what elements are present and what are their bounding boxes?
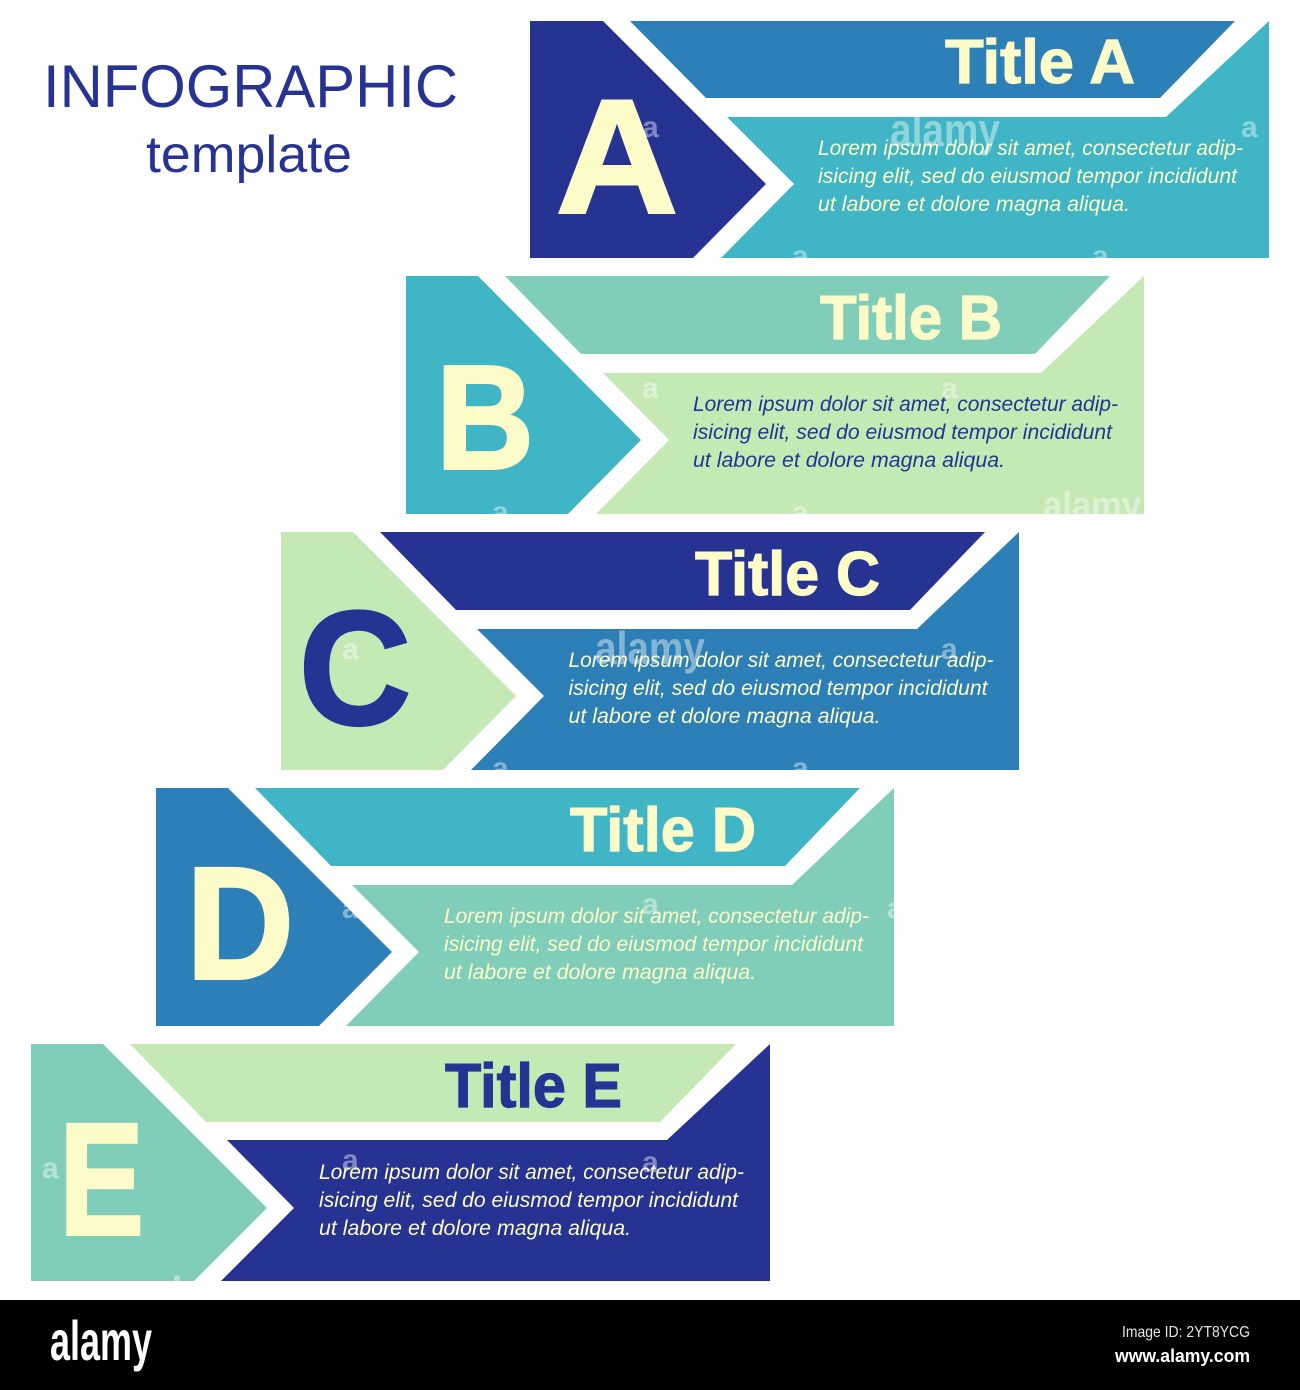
subheading: template: template bbox=[146, 126, 352, 184]
body panel: A bbox=[721, 21, 1269, 258]
text block: E: isicing elit, sed do eiusmod tempor incididunt bbox=[319, 1188, 739, 1212]
heading: INFOGRAPHIC: INFOGRAPHIC bbox=[43, 53, 458, 120]
panel: row E bbox=[31, 1044, 770, 1281]
text block: D bbox=[444, 904, 869, 984]
watermarks: a bbox=[642, 111, 659, 144]
arrow: E bbox=[31, 1044, 267, 1281]
text block: B bbox=[693, 392, 1118, 472]
letter D: D bbox=[186, 834, 294, 1012]
panel: row C bbox=[281, 532, 1019, 770]
watermarks: a bbox=[941, 633, 958, 666]
watermarks: a bbox=[342, 633, 359, 666]
title bar: C bbox=[380, 532, 985, 610]
watermarks: alamy bbox=[1043, 485, 1141, 527]
heading: Title C: Title C bbox=[695, 540, 880, 609]
watermarks: a bbox=[642, 888, 659, 921]
watermarks: a bbox=[342, 1144, 359, 1177]
text block: D: Lorem ipsum dolor sit amet, consectetur adip- bbox=[444, 904, 869, 928]
letter B: B bbox=[436, 336, 534, 500]
title bar: D bbox=[255, 788, 860, 866]
arrow: D bbox=[156, 788, 392, 1026]
text block: B: ut labore et dolore magna aliqua. bbox=[693, 448, 1005, 472]
title bar: E bbox=[130, 1044, 736, 1122]
footer logo: alamy bbox=[50, 1309, 152, 1372]
heading: Title B: Title B bbox=[820, 284, 1002, 353]
watermarks: alamy bbox=[595, 622, 705, 674]
watermarks: a bbox=[792, 240, 809, 273]
panel: row B bbox=[406, 276, 1144, 514]
text block: E: ut labore et dolore magna aliqua. bbox=[319, 1216, 631, 1240]
watermarks: a bbox=[342, 892, 359, 925]
watermarks: a bbox=[1241, 111, 1258, 144]
image id: Image ID: 2YT8YCG bbox=[1122, 1324, 1250, 1341]
watermarks: a bbox=[642, 1146, 659, 1179]
title bar: B bbox=[505, 276, 1110, 354]
panel: row A bbox=[530, 21, 1269, 258]
watermarks: a bbox=[42, 1152, 59, 1185]
text block: B: isicing elit, sed do eiusmod tempor incididunt bbox=[693, 420, 1113, 444]
watermarks: a bbox=[887, 892, 904, 925]
text block: D: ut labore et dolore magna aliqua. bbox=[444, 960, 756, 984]
watermarks: a bbox=[1092, 240, 1109, 273]
watermarks: a bbox=[492, 496, 509, 529]
watermarks: alamy bbox=[890, 104, 1000, 156]
body panel: B bbox=[596, 276, 1144, 514]
watermarks: a bbox=[941, 372, 958, 405]
text block: A: isicing elit, sed do eiusmod tempor incididunt bbox=[818, 164, 1238, 188]
letter E: E bbox=[59, 1090, 144, 1268]
body panel: E bbox=[221, 1044, 770, 1281]
panel: row D bbox=[156, 788, 894, 1026]
text block: A: Lorem ipsum dolor sit amet, consectetur adip- bbox=[818, 136, 1243, 160]
arrow: A bbox=[530, 21, 766, 258]
footer bar bbox=[0, 1300, 1300, 1390]
text block: A bbox=[818, 136, 1243, 216]
heading: Title D: Title D bbox=[570, 796, 756, 865]
text block: A: ut labore et dolore magna aliqua. bbox=[818, 192, 1130, 216]
text block: B: Lorem ipsum dolor sit amet, consectetur adip- bbox=[693, 392, 1118, 416]
title bar: A bbox=[630, 21, 1235, 98]
website: www.alamy.com bbox=[1114, 1346, 1250, 1366]
watermarks: a bbox=[492, 752, 509, 785]
heading: Title E: Title E bbox=[445, 1052, 622, 1121]
text block: C: ut labore et dolore magna aliqua. bbox=[568, 704, 880, 728]
title block bbox=[43, 53, 458, 184]
watermarks: a bbox=[642, 372, 659, 405]
text block: C bbox=[568, 648, 994, 728]
letter A: A bbox=[556, 66, 678, 248]
watermarks: alamy bbox=[150, 1271, 260, 1304]
body panel: C bbox=[471, 532, 1019, 770]
text block: D: isicing elit, sed do eiusmod tempor incididunt bbox=[444, 932, 864, 956]
body panel: D bbox=[346, 788, 894, 1026]
arrow: C bbox=[281, 532, 516, 770]
watermarks: a bbox=[792, 496, 809, 529]
arrow: B bbox=[406, 276, 641, 514]
text block: E bbox=[319, 1160, 744, 1240]
watermarks: a bbox=[792, 752, 809, 785]
letter C: C bbox=[299, 578, 411, 759]
text block: E: Lorem ipsum dolor sit amet, consectetur adip- bbox=[319, 1160, 744, 1184]
text block: C: isicing elit, sed do eiusmod tempor incididunt bbox=[568, 676, 989, 700]
text block: C: Lorem ipsum dolor sit amet, consectetur adip- bbox=[568, 648, 994, 672]
heading: Title A: Title A bbox=[945, 28, 1135, 97]
